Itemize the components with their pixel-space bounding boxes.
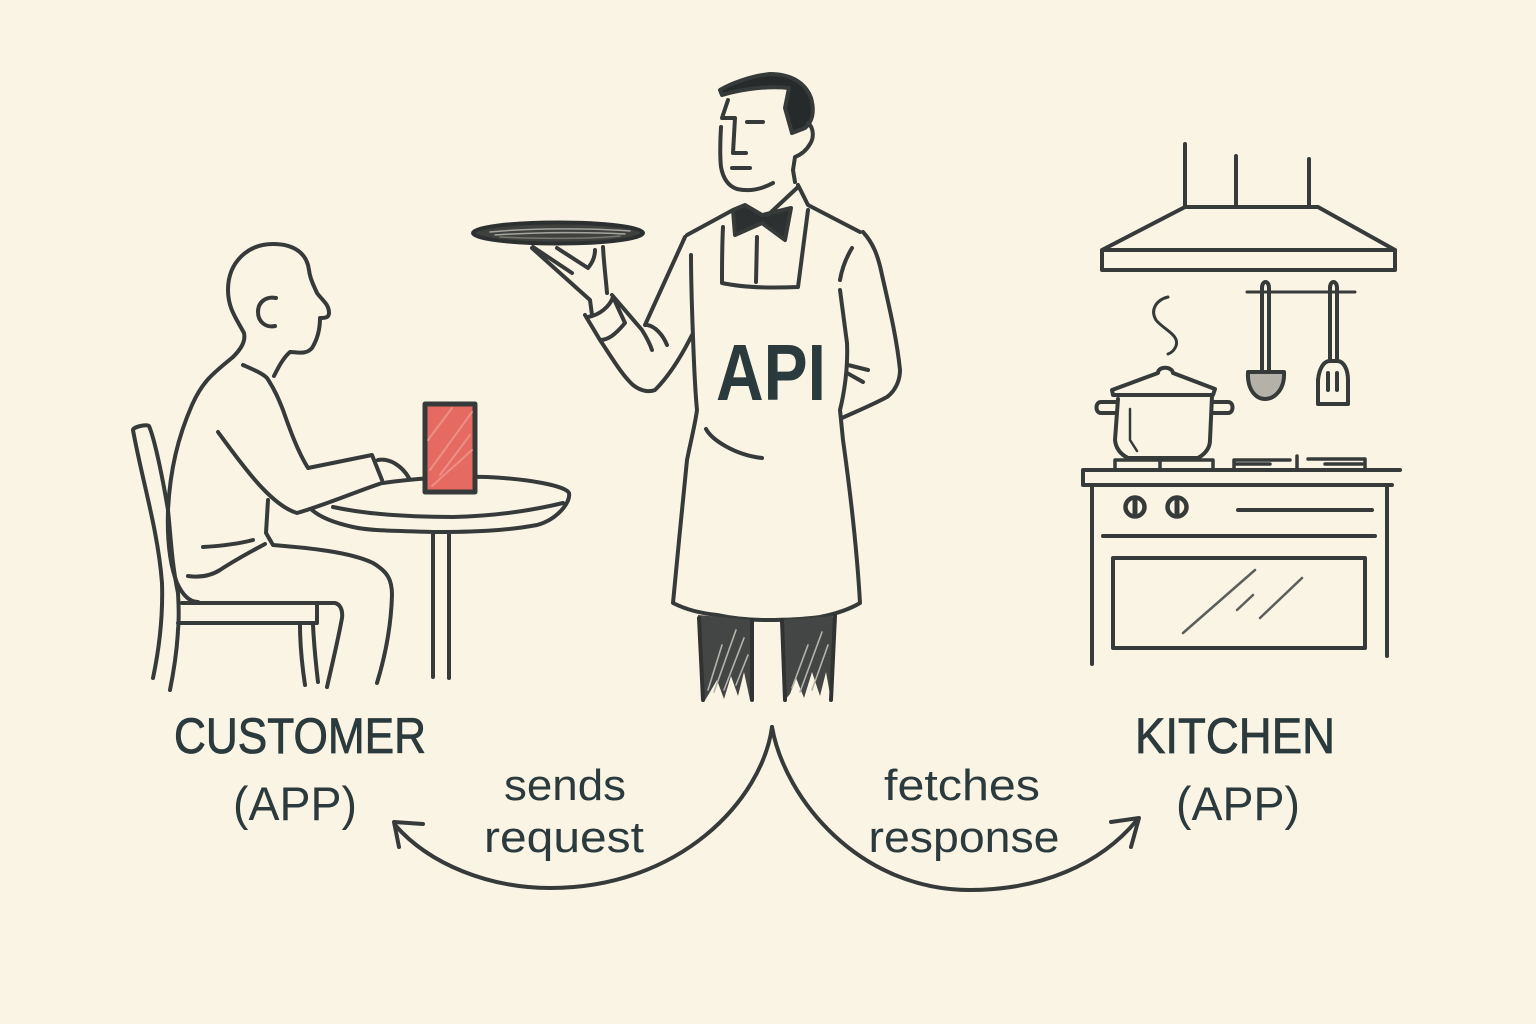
ladle: [1248, 282, 1284, 399]
label: kitchen: [1135, 708, 1335, 830]
range hood: [1102, 144, 1395, 270]
customer torso and arm: [168, 357, 409, 683]
label: fetches response: [868, 761, 1060, 862]
pot: [1096, 368, 1232, 458]
oven body: [1092, 485, 1387, 664]
oven knobs: [1126, 498, 1186, 516]
fetches: fetches: [884, 761, 1040, 810]
trousers: [698, 615, 835, 702]
illustration: kitchen: [1083, 144, 1400, 664]
response: response: [868, 813, 1060, 862]
arrow: to kitchen: [772, 727, 1139, 890]
illustration: waiter: [473, 74, 900, 702]
spatula: [1318, 282, 1348, 404]
cooktop: [1083, 470, 1400, 485]
stove burners: [1115, 456, 1365, 470]
tray: [473, 222, 643, 244]
waiter torso and collar: [645, 185, 860, 325]
label: sends request: [484, 761, 644, 862]
oven door: [1113, 558, 1365, 648]
illustration: customer at table: [133, 244, 569, 690]
waiter left arm and hand: [532, 247, 692, 391]
control panel lines: [1103, 510, 1375, 536]
table: [312, 477, 569, 678]
customer heading: CUSTOMER: [174, 708, 426, 764]
arrow: to customer: [394, 727, 772, 888]
waiter right arm behind back: [840, 232, 900, 418]
kitchen sublabel: (APP): [1176, 777, 1300, 830]
bow tie: [733, 205, 791, 240]
request: request: [484, 813, 644, 862]
sends: sends: [504, 761, 626, 810]
chair: [133, 425, 342, 690]
apron: [673, 255, 860, 620]
customer head: [228, 244, 329, 376]
phone: red menu card: [425, 404, 475, 492]
kitchen heading: KITCHEN: [1135, 708, 1335, 764]
hanging rail: [1247, 290, 1355, 294]
label: customer: [174, 708, 426, 830]
waiter hair: [720, 74, 813, 133]
steam: [1154, 297, 1177, 354]
waiter face: [720, 100, 813, 190]
customer sublabel: (APP): [233, 777, 357, 830]
apron label: API: API: [716, 328, 826, 417]
customer ear: [258, 298, 276, 326]
